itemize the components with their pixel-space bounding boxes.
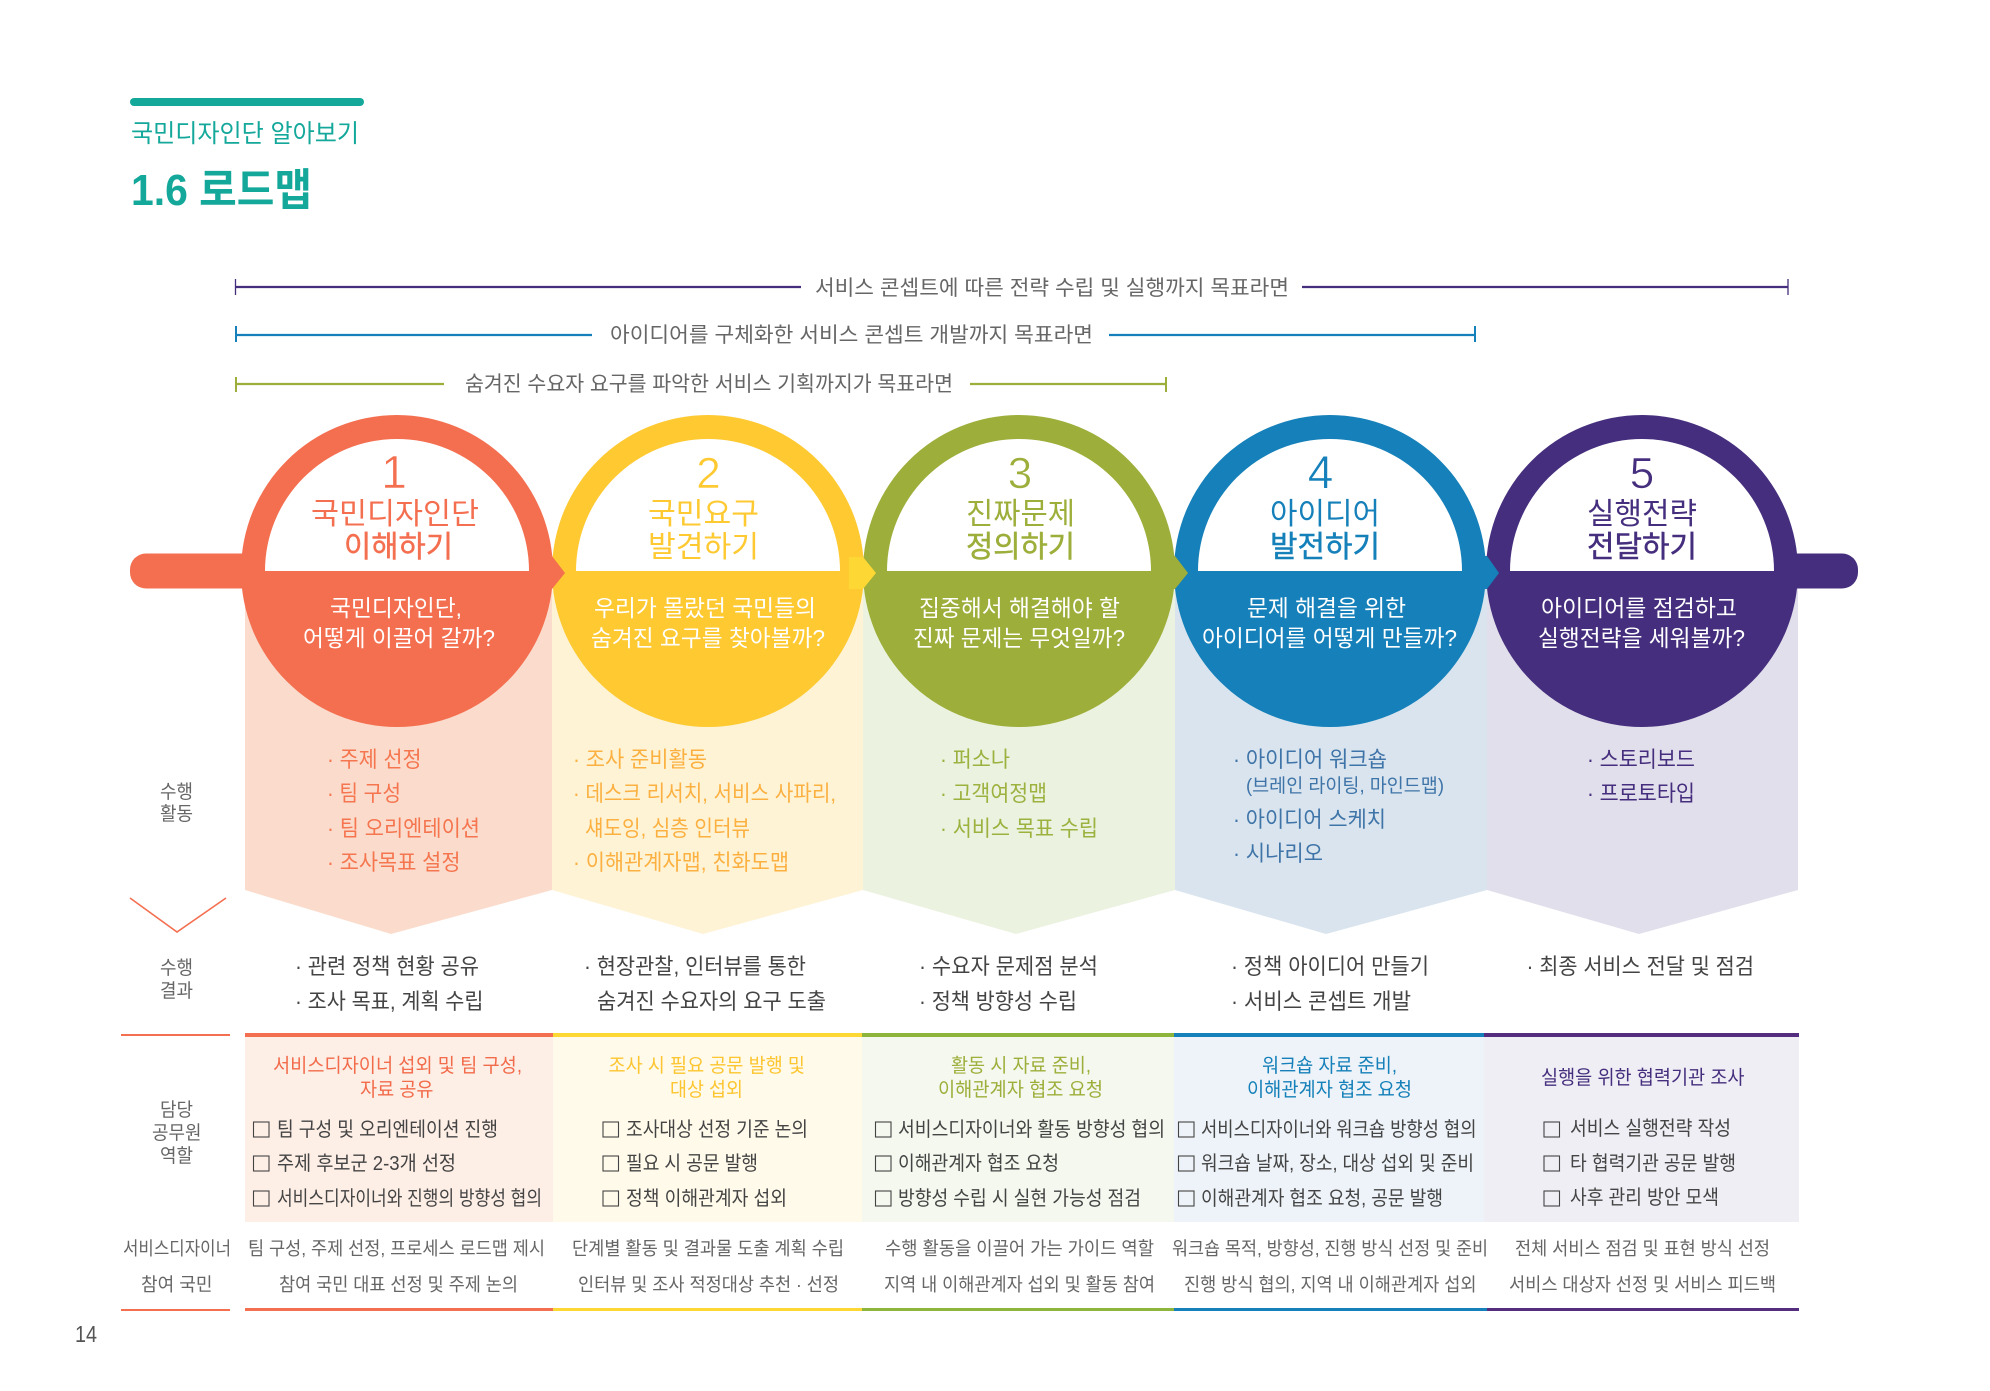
cell: step 5 officer role	[1484, 1033, 1799, 1222]
row label: designer and citizens	[123, 1238, 231, 1295]
circle: step 4: 아이디어	[1270, 498, 1380, 531]
results: step 2	[584, 954, 826, 1014]
cell: step 5 officer role: 타 협력기관 공문 발행	[1570, 1152, 1736, 1175]
circle: step 1: 이해하기	[344, 531, 453, 564]
activities: step 2: · 이해관계자맵, 친화도맵	[573, 850, 789, 875]
page title: 1.6 로드맵	[131, 166, 312, 215]
panel: step 2 background	[552, 571, 863, 934]
cell: step 4 officer role: 이해관계자 협조 요청, 공문 발행	[1201, 1187, 1443, 1210]
cell: step 1 officer role: 자료 공유	[360, 1079, 434, 1101]
activities: step 3: · 퍼소나	[940, 747, 1010, 772]
circle: step 4: 아이디어를 어떻게 만들까?	[1202, 625, 1457, 651]
roles: step 5: 서비스 대상자 선정 및 서비스 피드백	[1509, 1274, 1776, 1295]
results: step 4: · 서비스 콘셉트 개발	[1231, 989, 1411, 1014]
results: step 4: · 정책 아이디어 만들기	[1231, 954, 1429, 979]
activities: step 3	[940, 747, 1098, 841]
arrow: step 2 to 3	[849, 557, 876, 589]
row label: designer and citizens: 참여 국민	[141, 1274, 212, 1295]
circle: step 1: 국민디자인단,	[330, 595, 462, 621]
circle: step 4: 4	[1308, 446, 1333, 498]
cell: step 3 officer role: 이해관계자 협조 요청	[938, 1079, 1103, 1101]
results row	[295, 954, 1754, 1014]
panel: step 5 background	[1487, 571, 1798, 934]
circle: step 2	[552, 415, 864, 727]
panel: step 3 background	[863, 571, 1175, 934]
cell: step 4 officer role: 워크숍 자료 준비,	[1262, 1055, 1397, 1077]
circle: step 2: 숨겨진 요구를 찾아볼까?	[591, 625, 825, 651]
circle: step 5: 전달하기	[1587, 531, 1697, 564]
cell: step 4 officer role	[1174, 1033, 1484, 1222]
activities: step 1: · 조사목표 설정	[327, 850, 460, 875]
roles: step 4	[1172, 1238, 1488, 1295]
cell: step 1 officer role: 팀 구성 및 오리엔테이션 진행	[277, 1118, 498, 1141]
chevron arrow	[130, 898, 226, 932]
cell: step 5 officer role: 실행을 위한 협력기관 조사	[1541, 1067, 1745, 1089]
circle: step 5: 5	[1630, 449, 1654, 498]
roles: step 3: 수행 활동을 이끌어 가는 가이드 역할	[885, 1238, 1154, 1259]
cell: step 4 officer role: 서비스디자이너와 워크숍 방향성 협의	[1201, 1118, 1476, 1141]
left handle	[130, 554, 260, 588]
bracket: purple full scope	[235, 277, 1788, 300]
results: step 1: · 관련 정책 현황 공유	[295, 954, 479, 979]
roles: step 4: 진행 방식 협의, 지역 내 이해관계자 섭외	[1184, 1274, 1476, 1295]
row label: officer role	[152, 1099, 202, 1167]
activities: step 4	[1233, 747, 1444, 866]
roles: step 2	[572, 1238, 844, 1295]
activities: step 4: · 시나리오	[1233, 841, 1323, 866]
right handle	[1780, 554, 1858, 588]
section subtitle: 국민디자인단 알아보기	[131, 120, 359, 148]
activities: step 1: · 팀 오리엔테이션	[327, 816, 480, 841]
roles: step 5: 전체 서비스 점검 및 표현 방식 선정	[1515, 1238, 1770, 1259]
circle: step 3: 집중해서 해결해야 할	[919, 595, 1120, 621]
roles: step 3	[884, 1238, 1155, 1295]
bottom rules	[121, 1308, 1799, 1311]
circle: step 5: 실행전략을 세워볼까?	[1538, 625, 1745, 651]
circle: step 3	[863, 415, 1175, 727]
arrow: step 4 to 5	[1482, 556, 1499, 589]
circle: step 5: 아이디어를 점검하고	[1541, 595, 1737, 621]
activities: step 2: · 데스크 리서치, 서비스 사파리,	[573, 781, 836, 806]
circle: step 3: 진짜 문제는 무엇일까?	[913, 625, 1125, 651]
row label: results	[160, 957, 193, 1002]
results: step 3: · 정책 방향성 수립	[919, 989, 1077, 1014]
circle: step 3: 진짜문제	[966, 498, 1075, 531]
row label: activities: 활동	[160, 803, 193, 825]
goal scope brackets	[235, 277, 1788, 396]
roles: step 2: 인터뷰 및 조사 적정대상 추천 · 선정	[578, 1274, 839, 1295]
circle: step 4: 문제 해결을 위한	[1247, 595, 1406, 621]
cell: step 5 officer role: 사후 관리 방안 모색	[1570, 1186, 1719, 1209]
circle: step 2: 우리가 몰랐던 국민들의	[594, 595, 816, 621]
results: step 3	[919, 954, 1098, 1014]
circle: step 4	[1174, 415, 1486, 727]
activities: step 3: · 서비스 목표 수립	[940, 816, 1098, 841]
activities: step 4: (브레인 라이팅, 마인드맵)	[1246, 775, 1444, 797]
activities: step 4: · 아이디어 워크숍	[1233, 747, 1387, 772]
activities: step 2: · 조사 준비활동	[573, 747, 707, 772]
results: step 4	[1231, 954, 1429, 1014]
circle: step 1: 1	[381, 446, 407, 498]
circle: step 2: 2	[696, 449, 721, 498]
roles: step 1	[248, 1238, 545, 1295]
cell: step 5 officer role: 서비스 실행전략 작성	[1570, 1117, 1731, 1140]
circle: step 1	[241, 415, 553, 727]
results: step 5: · 최종 서비스 전달 및 점검	[1526, 954, 1754, 979]
row label: designer and citizens: 서비스디자이너	[123, 1238, 231, 1259]
cell: step 4 officer role: 이해관계자 협조 요청	[1247, 1079, 1412, 1101]
cell: step 2 officer role: 대상 섭외	[670, 1079, 743, 1101]
activities: step 4: · 아이디어 스케치	[1233, 807, 1386, 832]
bracket: blue concept scope	[235, 324, 1475, 347]
panel: step 1 background	[245, 571, 552, 934]
circle: step 3: 3	[1008, 449, 1032, 498]
activities: step 5: · 스토리보드	[1587, 747, 1695, 772]
cell: step 3 officer role: 서비스디자이너와 활동 방향성 협의	[898, 1118, 1165, 1141]
panel: step 4 background	[1175, 571, 1487, 934]
row label: activities	[160, 781, 193, 825]
results: step 3: · 수요자 문제점 분석	[919, 954, 1098, 979]
designer and citizen roles row	[248, 1238, 1776, 1295]
results: step 2: 숨겨진 수요자의 요구 도출	[597, 989, 826, 1014]
roles: step 3: 지역 내 이해관계자 섭외 및 활동 참여	[884, 1274, 1155, 1295]
left top rule	[121, 1034, 230, 1036]
cell: step 2 officer role	[553, 1033, 862, 1222]
activities: step 5	[1587, 747, 1695, 806]
bracket: purple full scope: 서비스 콘셉트에 따른 전략 수립 및 실행까지 목표라면	[815, 277, 1289, 300]
circle: step 4: 발전하기	[1270, 531, 1380, 564]
cell: step 1 officer role: 서비스디자이너 섭외 및 팀 구성,	[273, 1055, 522, 1077]
roles: step 1: 팀 구성, 주제 선정, 프로세스 로드맵 제시	[248, 1238, 545, 1259]
activities: step 3: · 고객여정맵	[940, 781, 1047, 806]
row label: results: 결과	[160, 980, 193, 1002]
circle: step 2: 발견하기	[648, 531, 759, 564]
arrow: step 1 to 2	[548, 556, 565, 589]
cell: step 3 officer role: 이해관계자 협조 요청	[898, 1152, 1059, 1175]
roles: step 5	[1509, 1238, 1776, 1295]
activities: step 1: · 팀 구성	[327, 781, 401, 806]
cell: step 3 officer role: 활동 시 자료 준비,	[951, 1055, 1091, 1077]
header	[130, 98, 364, 215]
activities: step 1	[327, 747, 480, 875]
circle: step 3: 정의하기	[966, 531, 1075, 564]
activities: step 5: · 프로토타입	[1587, 781, 1695, 806]
arrow: step 3 to 4	[1170, 556, 1188, 589]
results: step 2: · 현장관찰, 인터뷰를 통한	[584, 954, 806, 979]
cell: step 2 officer role: 필요 시 공문 발행	[626, 1152, 758, 1175]
cell: step 1 officer role	[245, 1033, 553, 1222]
circle: step 2: 국민요구	[648, 498, 759, 531]
cell: step 2 officer role: 정책 이해관계자 섭외	[626, 1187, 787, 1210]
cell: step 3 officer role	[862, 1033, 1174, 1222]
circle: step 5	[1486, 415, 1798, 727]
cell: step 2 officer role: 조사 시 필요 공문 발행 및	[608, 1055, 805, 1077]
activities: step 1: · 주제 선정	[327, 747, 422, 772]
page number: 14	[75, 1321, 97, 1347]
cell: step 3 officer role: 방향성 수립 시 실현 가능성 점검	[898, 1187, 1141, 1210]
cell: step 1 officer role: 서비스디자이너와 진행의 방향성 협의	[277, 1187, 542, 1210]
cell: step 4 officer role: 워크숍 날짜, 장소, 대상 섭외 및 준비	[1201, 1152, 1474, 1175]
row label: officer role: 역할	[160, 1145, 193, 1167]
row label: officer role: 공무원	[152, 1122, 202, 1144]
activities: step 2: 섀도잉, 심층 인터뷰	[585, 816, 750, 841]
bracket: blue concept scope: 아이디어를 구체화한 서비스 콘셉트 개발까지 목표라면	[610, 324, 1093, 347]
roles: step 4: 워크숍 목적, 방향성, 진행 방식 선정 및 준비	[1172, 1238, 1488, 1259]
row label: activities: 수행	[160, 781, 193, 803]
row label: results: 수행	[160, 957, 193, 979]
results: step 1	[295, 954, 484, 1014]
circle: step 1: 어떻게 이끌어 갈까?	[303, 625, 495, 651]
circle: step 5: 실행전략	[1587, 498, 1697, 531]
results: step 1: · 조사 목표, 계획 수립	[295, 989, 484, 1014]
bracket: green planning scope: 숨겨진 수요자 요구를 파악한 서비스 기획까지가 목표라면	[465, 373, 953, 396]
circle: step 1: 국민디자인단	[311, 498, 479, 531]
bracket: green planning scope	[235, 373, 1166, 396]
roles: step 1: 참여 국민 대표 선정 및 주제 논의	[279, 1274, 518, 1295]
roles: step 2: 단계별 활동 및 결과물 도출 계획 수립	[572, 1238, 844, 1259]
cell: step 1 officer role: 주제 후보군 2-3개 선정	[277, 1152, 456, 1175]
activities: step 2	[573, 747, 836, 875]
cell: step 2 officer role: 조사대상 선정 기준 논의	[626, 1118, 808, 1141]
row label: officer role: 담당	[160, 1099, 193, 1121]
